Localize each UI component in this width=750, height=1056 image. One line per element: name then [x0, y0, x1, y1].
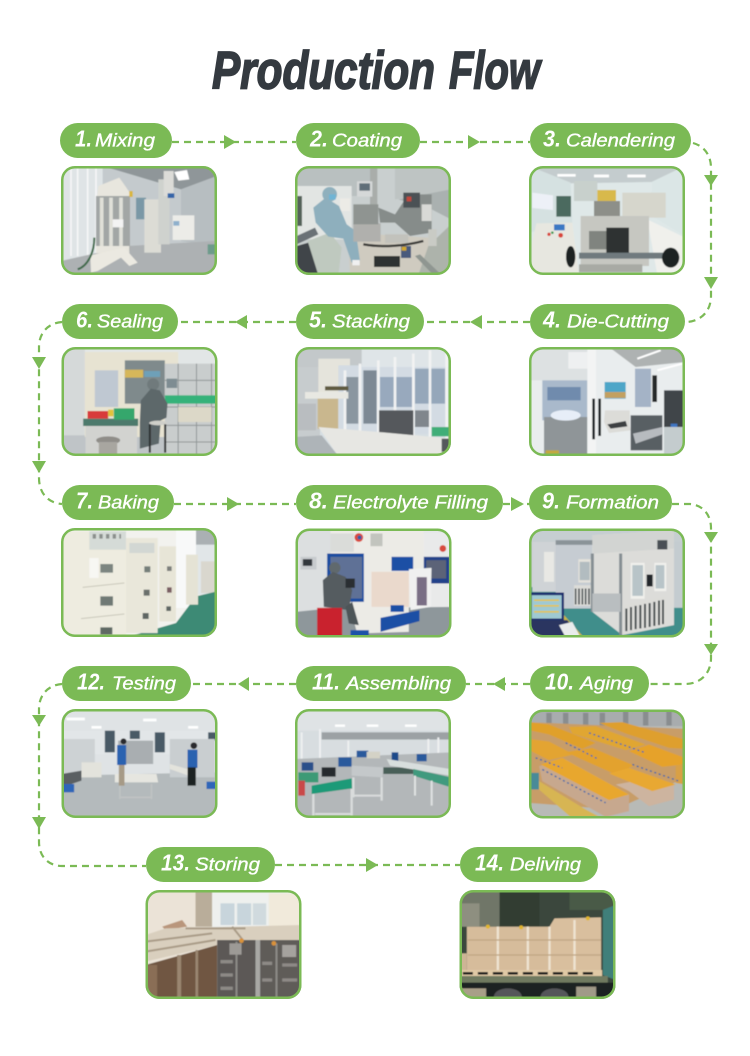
pill: 9. Formation: 9. — [542, 488, 560, 514]
pill: 11. Assembling: 11. — [312, 668, 340, 694]
panel: step 13 storing — [146, 847, 301, 999]
pill: 9. Formation: Formation — [566, 492, 659, 512]
photo: formation cabinets — [529, 528, 685, 637]
arrow: step 6 to 7 — [32, 322, 62, 504]
panel: step 11 assembling — [295, 666, 466, 818]
panel: step 10 aging — [529, 666, 685, 818]
arrow: step 8 to 9 — [503, 497, 530, 511]
pill: 4. Die-Cutting — [530, 304, 685, 339]
pill: 14. Deliving — [460, 847, 598, 882]
arrow: step 11 to 12 — [191, 677, 296, 691]
title: Production — [212, 42, 435, 100]
pill: 2. Coating: 2. — [309, 126, 328, 152]
arrow: step 4 to 5 — [424, 315, 530, 329]
pill: 5. Stacking: 5. — [309, 306, 327, 332]
pill: 6. Sealing: 6. — [76, 306, 93, 332]
pill: 12. Testing: 12. — [77, 668, 105, 694]
panel: step 3 calendering — [529, 123, 691, 275]
panel: step 5 stacking — [295, 304, 451, 456]
pill: 4. Die-Cutting: 4. — [542, 306, 561, 332]
photo: stacked cartons in warehouse — [146, 890, 301, 999]
photo: operator at sealing station — [62, 347, 217, 456]
photo: mixing machines in clean room — [61, 166, 217, 275]
pill: 14. Deliving: 14. — [475, 850, 504, 876]
photo: die-cutting machine — [529, 347, 685, 456]
pill: 6. Sealing — [62, 304, 178, 339]
panel: step 6 sealing — [62, 304, 217, 456]
pill: 12. Testing: Testing — [112, 674, 176, 694]
photo: battery pallets aging — [529, 710, 685, 818]
pill: 6. Sealing: Sealing — [97, 312, 163, 332]
pill: 10. Aging: Aging — [579, 674, 633, 694]
pill: 7. Baking — [62, 485, 174, 520]
arrow: step 12 to 13 — [32, 684, 146, 866]
arrow: step 9 to 10 — [649, 504, 718, 684]
pill: 13. Storing: Storing — [195, 854, 260, 874]
pill: 1. Mixing: 1. — [75, 126, 92, 152]
arrow: step 13 to 14 — [275, 858, 460, 872]
pill: 11. Assembling: Assembling — [345, 674, 451, 694]
pill: 2. Coating — [296, 123, 420, 158]
panel: step 14 delivering — [460, 847, 615, 1005]
pill: 1. Mixing: Mixing — [95, 130, 155, 150]
title: Flow — [449, 42, 543, 100]
pill: 13. Storing: 13. — [161, 850, 190, 876]
panel: step 2 coating — [295, 123, 451, 275]
arrow: step 7 to 8 — [174, 497, 296, 511]
panel: step 4 die-cutting — [529, 304, 685, 456]
pill: 4. Die-Cutting: Die-Cutting — [567, 312, 669, 332]
pill: 11. Assembling — [296, 666, 466, 701]
panel: step 8 electrolyte filling — [296, 485, 503, 637]
pill: 14. Deliving: Deliving — [510, 854, 581, 874]
photo: baking ovens — [61, 528, 217, 637]
pill: 1. Mixing — [60, 123, 172, 158]
photo: stacking machine line — [295, 347, 451, 456]
pill: 13. Storing — [146, 847, 275, 882]
photo: electrolyte filling glovebox — [296, 528, 451, 637]
arrow: step 2 to 3 — [420, 135, 530, 149]
pill: 8. Electrolyte Filling: Electrolyte Filling — [333, 492, 488, 512]
pill: 2. Coating: Coating — [332, 130, 402, 150]
photo: testing workshop — [62, 709, 217, 818]
pill: 10. Aging — [530, 666, 649, 701]
pill: 3. Calendering: 3. — [543, 126, 561, 152]
photo: truck loaded with cartons — [460, 890, 615, 1005]
photo: calendering machine — [529, 166, 685, 275]
pill: 5. Stacking — [296, 304, 424, 339]
pill: 8. Electrolyte Filling: 8. — [309, 488, 328, 514]
pill: 12. Testing — [62, 666, 191, 701]
panel: step 9 formation — [529, 485, 685, 637]
photo: operator at coating machine — [295, 166, 451, 275]
arrow: step 3 to 4 — [685, 143, 718, 322]
pill: 3. Calendering — [530, 123, 691, 158]
pill: 9. Formation — [529, 485, 672, 520]
panel: step 1 mixing — [60, 123, 217, 275]
arrow: step 5 to 6 — [178, 315, 296, 329]
pill: 7. Baking: 7. — [76, 488, 93, 514]
pill: 10. Aging: 10. — [545, 668, 574, 694]
pill: 5. Stacking: Stacking — [332, 312, 410, 332]
arrow: step 10 to 11 — [466, 677, 530, 691]
pill: 3. Calendering: Calendering — [566, 130, 675, 150]
panel: step 12 testing — [62, 666, 217, 818]
photo: assembling workshop — [295, 709, 451, 818]
pill: 8. Electrolyte Filling — [296, 485, 503, 520]
pill: 7. Baking: Baking — [98, 492, 159, 512]
arrow: step 1 to 2 — [172, 135, 296, 149]
panel: step 7 baking — [61, 485, 217, 637]
